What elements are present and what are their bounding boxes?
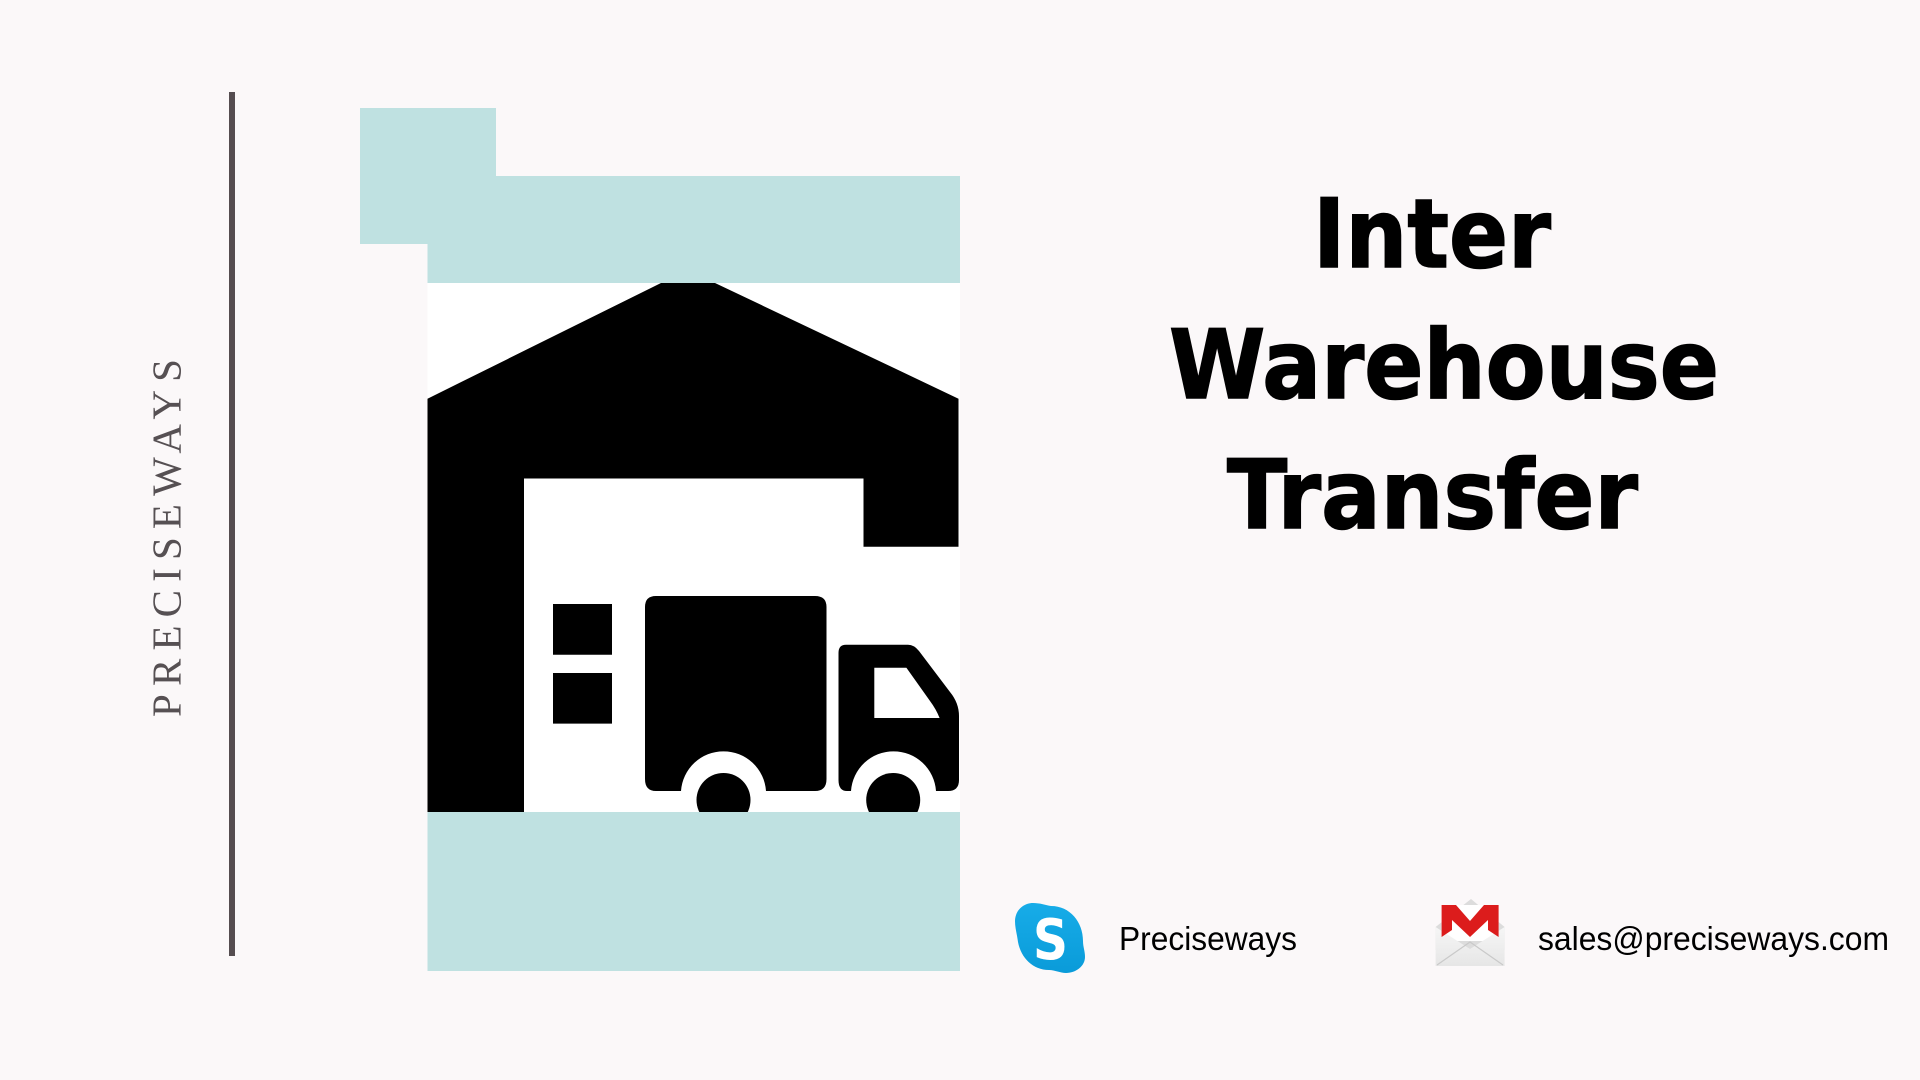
contact: skype name: Preciseways xyxy=(1119,920,1297,957)
title line 3: Transfer xyxy=(1227,441,1638,551)
panel: warehouse image block xyxy=(360,108,960,971)
truck cargo body xyxy=(645,596,826,791)
skype letter: S xyxy=(1033,908,1068,973)
vertical divider bar xyxy=(229,92,235,956)
infographic canvas xyxy=(153,92,1887,973)
contact: email address: sales@preciseways.com xyxy=(1538,920,1889,957)
icon: skype xyxy=(1015,903,1085,973)
truck front wheel xyxy=(866,773,920,812)
envelope body xyxy=(1436,927,1505,966)
teal corner square xyxy=(360,108,496,244)
teal bottom band xyxy=(428,812,960,971)
teal top band xyxy=(428,176,960,283)
title xyxy=(1169,180,1719,551)
white image background xyxy=(428,283,960,812)
letter paper xyxy=(1442,905,1499,941)
stacked boxes xyxy=(553,604,612,724)
envelope fold lines xyxy=(1437,942,1503,965)
truck rear wheel xyxy=(696,773,750,812)
red M mark xyxy=(1442,905,1499,937)
icon: warehouse with truck xyxy=(428,283,959,827)
title line 2: Warehouse xyxy=(1169,311,1719,421)
truck cab xyxy=(838,645,959,791)
warehouse building xyxy=(428,283,958,812)
envelope back flap xyxy=(1436,899,1505,950)
icon: gmail envelope xyxy=(1436,899,1505,966)
title line 1: Inter xyxy=(1313,180,1551,290)
brand name: vertical text: PRECISEWAYS xyxy=(144,359,190,717)
skype blob xyxy=(1015,903,1085,973)
